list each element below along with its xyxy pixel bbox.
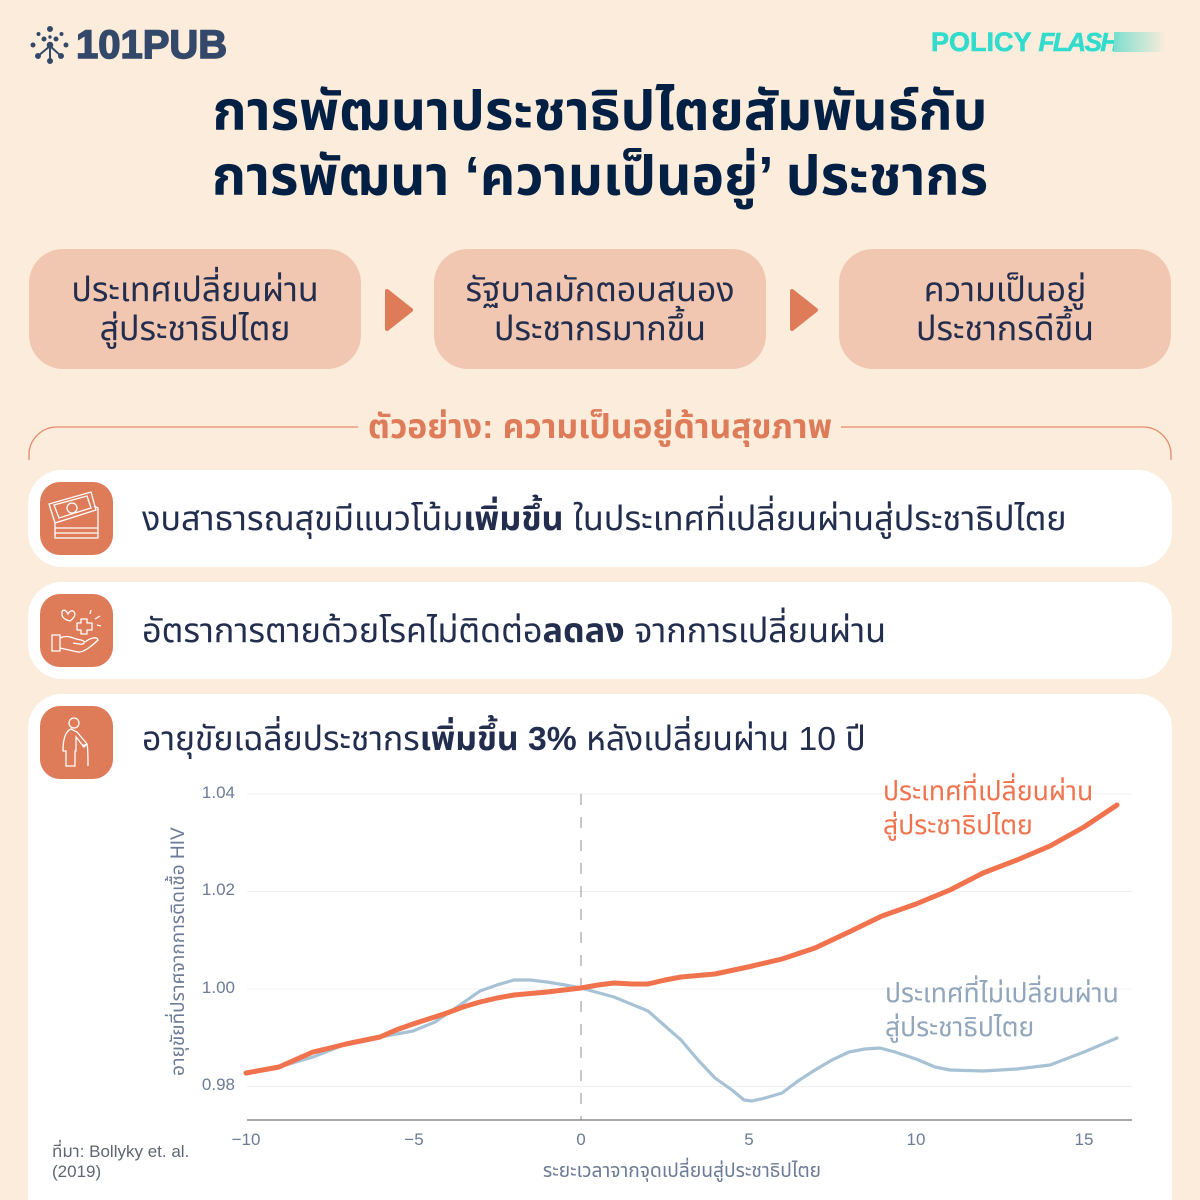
- zero marker: [580, 794, 582, 1120]
- x axis labels: −10: [232, 1130, 260, 1149]
- panel: budget: [28, 470, 1172, 567]
- grid lines: [247, 794, 1132, 1086]
- label: non-transition countries: สู่ประชาธิปไตย: [885, 1012, 1034, 1043]
- title: การพัฒนาประชาธิปไตยสัมพันธ์กับ: [213, 80, 987, 142]
- step: wellbeing: [839, 249, 1171, 369]
- step: transition: สู่ประชาธิปไตย: [100, 310, 290, 348]
- x axis: [247, 1119, 1132, 1121]
- label: non-transition countries: ประเทศที่ไม่เปลี่ยนผ่าน: [885, 975, 1119, 1008]
- y axis labels: 0.98: [202, 1075, 235, 1094]
- step: government response: รัฐบาลมักตอบสนอง: [465, 271, 735, 309]
- logo: Policy Flash: POLICY FLASH: [931, 27, 1118, 57]
- step: transition: ประเทศเปลี่ยนผ่าน: [71, 271, 319, 309]
- logo: 101PUB: 101PUB: [76, 23, 227, 67]
- arrow: [790, 289, 818, 332]
- y axis labels: [202, 783, 235, 1094]
- panel: mortality: [28, 582, 1172, 679]
- step: government response: ประชากรมากขึ้น: [494, 310, 706, 348]
- line: transition countries: [246, 805, 1117, 1073]
- source: ที่มา: Bollyky et. al.: [52, 1142, 189, 1161]
- step: wellbeing: ประชากรดีขึ้น: [916, 310, 1094, 348]
- panel: life expectancy: [28, 694, 1172, 1200]
- icon: caring hand: [40, 594, 113, 667]
- step: transition: [29, 249, 361, 369]
- source: (2019): [52, 1162, 101, 1181]
- arrow: [385, 289, 414, 332]
- section bracket: [28, 426, 1172, 460]
- label: transition countries: ประเทศที่เปลี่ยนผ่าน: [883, 773, 1093, 806]
- line: non-transition countries: [246, 980, 1117, 1101]
- icon: elderly person: [40, 706, 113, 779]
- y axis title: อายุขัยที่ปราศจากการติดเชื้อ HIV: [164, 827, 189, 1076]
- source: [52, 1140, 189, 1181]
- text: อัตราการตายด้วยโรคไม่ติดต่อลดลง จากการเปลี่ยนผ่าน: [142, 612, 886, 650]
- x axis labels: [232, 1130, 1093, 1149]
- section heading: ตัวอย่าง: ความเป็นอยู่ด้านสุขภาพ: [368, 408, 832, 446]
- x axis labels: 5: [744, 1130, 754, 1149]
- x axis labels: −5: [404, 1130, 424, 1149]
- x axis title: ระยะเวลาจากจุดเปลี่ยนสู่ประชาธิปไตย: [543, 1157, 821, 1183]
- step: wellbeing: ความเป็นอยู่: [924, 271, 1086, 309]
- icon: money: [40, 482, 113, 555]
- y axis labels: 1.00: [202, 978, 235, 997]
- title: [212, 80, 988, 210]
- y axis labels: 1.02: [202, 880, 235, 899]
- x axis labels: 10: [907, 1130, 925, 1149]
- text: งบสาธารณสุขมีแนวโน้มเพิ่มขึ้น ในประเทศที่เปลี่ยนผ่านสู่ประชาธิปไตย: [142, 500, 1067, 538]
- title: การพัฒนา ‘ความเป็นอยู่’ ประชากร: [212, 145, 988, 207]
- label: transition countries: สู่ประชาธิปไตย: [883, 810, 1033, 841]
- y axis labels: 1.04: [202, 783, 235, 802]
- x axis labels: 0: [576, 1130, 586, 1149]
- text: อายุขัยเฉลี่ยประชากรเพิ่มขึ้น 3% หลังเปลี่ยนผ่าน 10 ปี: [142, 720, 866, 758]
- x axis labels: 15: [1075, 1130, 1093, 1149]
- step: government response: [434, 249, 766, 369]
